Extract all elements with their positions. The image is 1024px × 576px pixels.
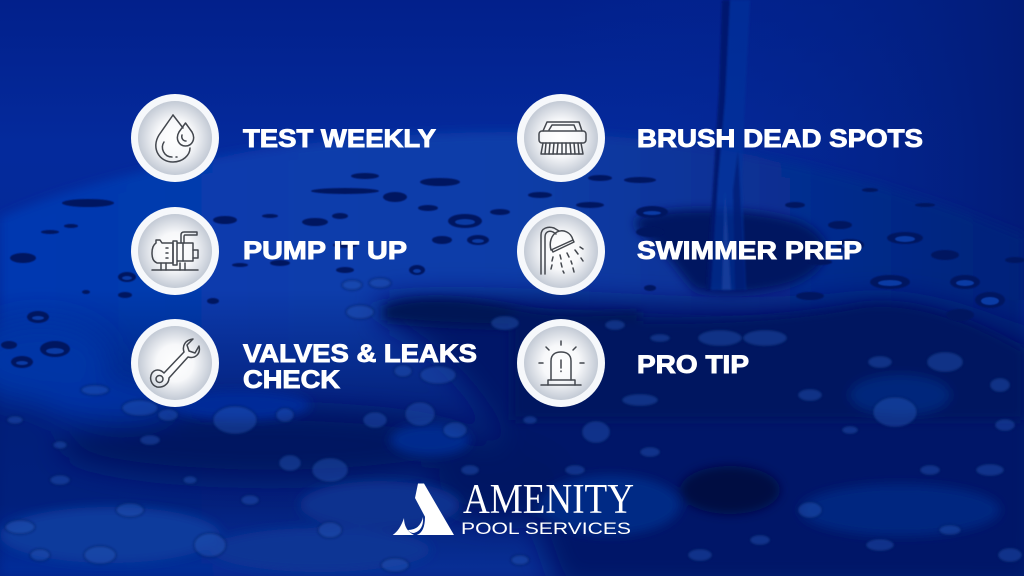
icon: wrench: [151, 339, 199, 387]
item: pro tip: [517, 319, 749, 407]
icon: scrub brush: [539, 122, 586, 154]
icon circle: [131, 207, 219, 295]
label: BRUSH DEAD SPOTS: [637, 125, 923, 153]
item: valves and leaks check: [131, 319, 477, 407]
label: PRO TIP: [637, 351, 749, 379]
logo mark: [393, 484, 454, 535]
item: pump it up: [131, 207, 407, 295]
icon circle: [517, 94, 605, 182]
icon circle: [131, 319, 219, 407]
label: PUMP IT UP: [243, 237, 407, 265]
icon: shower: [541, 227, 583, 274]
label: TEST WEEKLY: [243, 125, 436, 153]
item: brush dead spots: [517, 94, 923, 182]
tagline: POOL SERVICES: [461, 520, 631, 538]
light bubbles in lower water: [5, 278, 1022, 572]
label: CHECK: [243, 366, 340, 394]
item: swimmer prep: [517, 207, 862, 295]
logo: Amenity Pool Services: [393, 477, 634, 538]
dark droplets on surface: [1, 173, 1024, 368]
label: [243, 340, 477, 394]
wordmark: AMENITY: [463, 477, 634, 523]
icon circle: [517, 319, 605, 407]
item: test weekly: [131, 94, 436, 182]
droplet highlights: [16, 211, 999, 365]
icon: pump: [152, 232, 198, 270]
icon circle: [131, 94, 219, 182]
icon: alarm beacon: [539, 341, 584, 385]
label: VALVES & LEAKS: [243, 340, 477, 368]
water stream: [706, 0, 750, 290]
icon circle: [517, 207, 605, 295]
icon: water drops: [156, 115, 194, 162]
label: SWIMMER PREP: [637, 237, 862, 265]
